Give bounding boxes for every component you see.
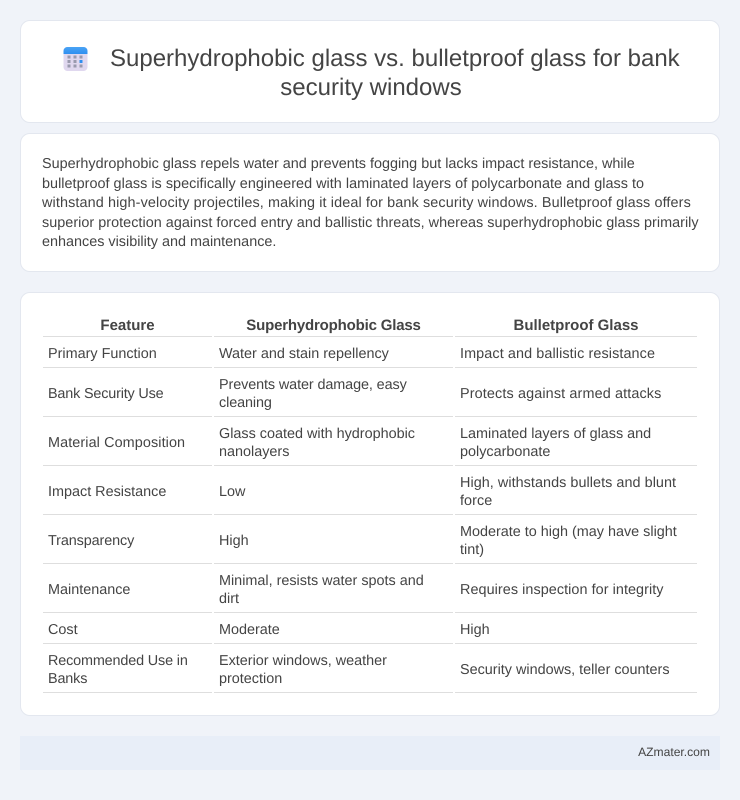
comparison table: Moderate <box>219 622 280 638</box>
comparison table: High <box>460 622 490 638</box>
comparison table <box>43 317 697 693</box>
comparison table: Protects against armed attacks <box>460 386 661 402</box>
row: Recommended Use in Banks <box>48 652 188 686</box>
comparison table: Moderate to high (may have slight <box>460 524 677 540</box>
comparison table: High, withstands bullets and blunt <box>460 474 676 490</box>
panel: intro summary <box>20 133 720 272</box>
comparison table: tint) <box>460 542 484 558</box>
footer bar <box>20 736 720 770</box>
row: Primary Function: Primary Function <box>48 346 157 362</box>
comparison table: Low <box>219 484 245 500</box>
comparison table: Exterior windows, weather <box>219 652 387 668</box>
comparison table: Security windows, teller counters <box>460 662 670 678</box>
row: Material Composition: Material Composition <box>48 434 185 450</box>
comparison table: nanolayers <box>219 444 289 460</box>
comparison table: force <box>460 492 492 508</box>
comparison table: Impact and ballistic resistance <box>460 346 655 362</box>
header: Superhydrophobic Glass: Superhydrophobic Glass <box>246 317 421 334</box>
intro text: superior protection against forced entry and ballistic threats, whereas superhydrophobic glass primarily <box>42 214 699 230</box>
intro text: Superhydrophobic glass repels water and prevents fogging but lacks impact resistance, while <box>42 156 635 172</box>
comparison table: cleaning <box>219 394 272 410</box>
intro text <box>42 156 699 250</box>
row: Impact Resistance: Impact Resistance <box>48 484 166 500</box>
title: security windows <box>280 74 462 101</box>
icon: calendar <box>64 47 88 71</box>
row: Maintenance: Maintenance <box>48 582 130 598</box>
comparison table: High <box>219 532 249 548</box>
footer credit: AZmater.com <box>638 745 710 759</box>
title: Superhydrophobic glass vs. bulletproof glass for bank <box>110 45 680 72</box>
row: Cost: Cost <box>48 622 78 638</box>
panel: title card <box>20 20 720 123</box>
comparison table: Requires inspection for integrity <box>460 582 664 598</box>
title <box>110 45 680 101</box>
intro text: withstand high-velocity projectiles, making it ideal for bank security windows. Bulletproof glass offers <box>42 195 691 211</box>
comparison table: Minimal, resists water spots and <box>219 572 424 588</box>
header: Bulletproof Glass: Bulletproof Glass <box>513 317 639 334</box>
intro text: enhances visibility and maintenance. <box>42 234 276 250</box>
comparison table: Water and stain repellency <box>219 346 389 362</box>
header: Feature: Feature <box>100 317 155 334</box>
row: Bank Security Use: Bank Security Use <box>48 386 163 402</box>
comparison table: dirt <box>219 590 239 606</box>
intro text: bulletproof glass is specifically engineered with laminated layers of polycarbonate and glass to <box>42 176 644 192</box>
comparison table: protection <box>219 670 282 686</box>
comparison table: Prevents water damage, easy <box>219 376 407 392</box>
panel: comparison table card <box>20 292 720 716</box>
comparison table: Laminated layers of glass and <box>460 426 651 442</box>
comparison table: Glass coated with hydrophobic <box>219 426 415 442</box>
row: Recommended Use in Banks: Banks <box>48 670 87 686</box>
row: Recommended Use in Banks: Recommended Use in <box>48 652 188 668</box>
row: Transparency: Transparency <box>48 532 134 548</box>
comparison table: polycarbonate <box>460 444 550 460</box>
